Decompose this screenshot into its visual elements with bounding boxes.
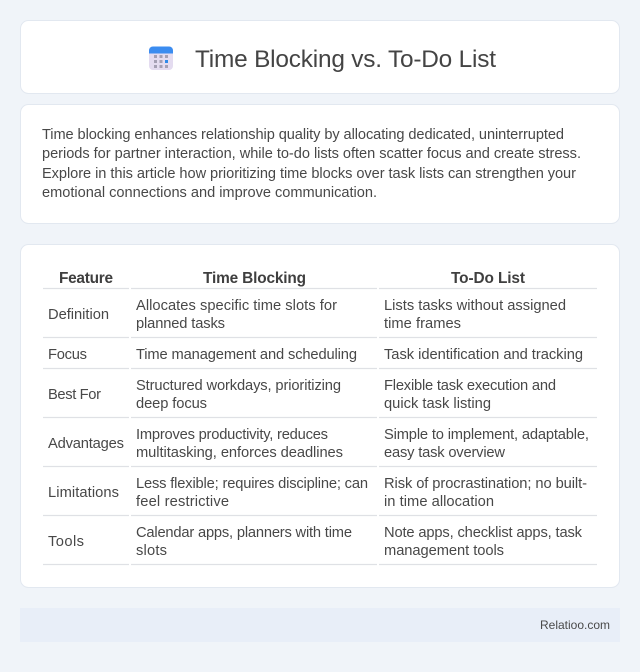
row: advantages: Advantages <box>48 436 124 452</box>
intro text: Explore in this article how prioritizing time blocks over task lists can strengthen your <box>42 166 576 182</box>
row: limitations: feel restrictive <box>136 494 229 510</box>
row: focus: Time management and scheduling <box>136 347 357 363</box>
row: focus: Task identification and tracking <box>384 347 583 363</box>
icon: calendar <box>149 46 173 70</box>
row: definition <box>48 298 566 332</box>
row: advantages: Simple to implement, adaptable, <box>384 427 589 443</box>
row: best for: Structured workdays, prioritizing <box>136 378 341 394</box>
row: advantages <box>48 427 589 461</box>
table header: To-Do List <box>451 270 525 287</box>
table header: Feature <box>59 270 113 287</box>
row: tools: Note apps, checklist apps, task <box>384 525 583 541</box>
panel: title card <box>20 20 620 94</box>
row: tools <box>48 525 583 559</box>
row: tools: Calendar apps, planners with time <box>136 525 352 541</box>
row: tools: Tools <box>48 534 84 550</box>
row: focus <box>48 347 583 363</box>
title: Time Blocking vs. To-Do List <box>195 46 496 73</box>
table header <box>59 270 525 287</box>
row: limitations: in time allocation <box>384 494 494 510</box>
intro text <box>42 127 581 201</box>
row: limitations: Risk of procrastination; no built- <box>384 476 587 492</box>
row: best for: Flexible task execution and <box>384 378 556 394</box>
row: limitations: Limitations <box>48 485 119 501</box>
footer <box>20 608 620 642</box>
row: definition: Allocates specific time slots for <box>136 298 337 314</box>
row: best for: deep focus <box>136 396 207 412</box>
row: definition: time frames <box>384 316 461 332</box>
row: best for: Best For <box>48 387 101 403</box>
table header: Time Blocking <box>203 270 306 287</box>
row: best for <box>48 378 556 412</box>
row: definition: planned tasks <box>136 316 225 332</box>
row: limitations: Less flexible; requires discipline; can <box>136 476 368 492</box>
row: focus: Focus <box>48 347 87 363</box>
row: advantages: Improves productivity, reduces <box>136 427 328 443</box>
row: tools: slots <box>136 543 167 559</box>
footer text: Relatioo.com <box>540 618 610 632</box>
row: limitations <box>48 476 587 510</box>
row: definition: Lists tasks without assigned <box>384 298 566 314</box>
row: definition: Definition <box>48 307 109 323</box>
panel: comparison table <box>20 244 620 588</box>
intro text: periods for partner interaction, while to-do lists often scatter focus and create stress. <box>42 146 581 162</box>
row: best for: quick task listing <box>384 396 491 412</box>
row: tools: management tools <box>384 543 504 559</box>
intro text: emotional connections and improve communication. <box>42 185 377 201</box>
row: advantages: easy task overview <box>384 445 505 461</box>
panel: introduction <box>20 104 620 224</box>
intro text: Time blocking enhances relationship quality by allocating dedicated, uninterrupted <box>42 127 564 143</box>
row: advantages: multitasking, enforces deadlines <box>136 445 343 461</box>
